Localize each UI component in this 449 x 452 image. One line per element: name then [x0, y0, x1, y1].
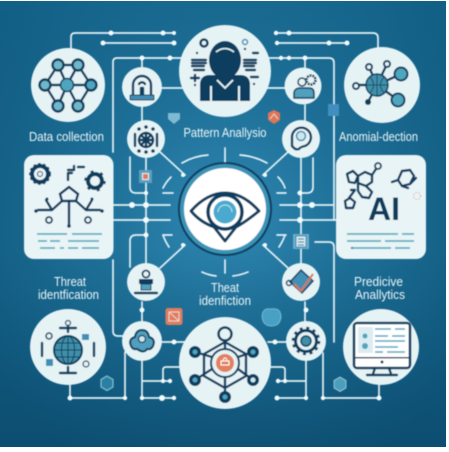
infographic content — [24, 25, 426, 409]
node: search bubble — [282, 120, 320, 158]
heading: Threat identification center — [199, 281, 251, 308]
panel: AI: AI — [368, 191, 400, 227]
panel: threat workflow — [24, 155, 114, 259]
heading: Data collection: Data collection — [29, 130, 104, 144]
icon: blue hexagon — [334, 377, 346, 392]
node: network wheel — [127, 120, 165, 158]
icon: hexagon outline — [101, 376, 113, 390]
node: checkmark — [282, 263, 320, 301]
node: settings gear — [286, 321, 326, 361]
heading: Anomaly detection: Anomial-dection — [339, 130, 418, 144]
node: central eye — [178, 162, 272, 256]
icon: person — [200, 41, 250, 101]
icon: eye — [191, 193, 259, 241]
node: data collection — [31, 48, 105, 122]
node: pattern analysis person — [179, 25, 271, 117]
node: alert icon — [122, 67, 162, 107]
node: device on stand — [127, 263, 165, 301]
icon: shield badge — [168, 113, 180, 124]
node: cloud people — [122, 321, 162, 361]
connector dots — [68, 30, 382, 401]
node: anomaly detection — [344, 47, 420, 123]
panel: AI — [336, 155, 426, 259]
heading: Threat identification center: idenfiction — [199, 294, 251, 308]
icon: side glyphs — [191, 40, 258, 86]
heading: Predictive Analytics: Predicive — [354, 275, 403, 289]
heading: Threat identification left — [38, 275, 99, 302]
heading: Threat identification left: Threat — [54, 275, 86, 289]
icon: orange square — [166, 308, 182, 325]
node: threat identification globe — [30, 309, 106, 385]
heading: Threat identification center: Theat — [211, 281, 239, 295]
heading: Predictive Analytics: Anallytics — [355, 288, 405, 302]
icon: pale brain — [262, 309, 281, 326]
chip: square marker — [139, 170, 152, 183]
icon: orange hexagon — [268, 110, 280, 124]
heading: Pattern Analysis: Pattern Anallysio — [184, 126, 267, 140]
chip: blue square — [328, 104, 339, 116]
node: predictive analytics monitor — [343, 309, 419, 385]
chip: document — [293, 234, 309, 249]
node: threat network — [179, 317, 271, 409]
node: gear and cloud — [284, 68, 322, 104]
heading: Threat identification left: identfication — [38, 288, 99, 302]
heading: Predictive Analytics — [354, 275, 405, 302]
connector lines — [70, 33, 379, 398]
